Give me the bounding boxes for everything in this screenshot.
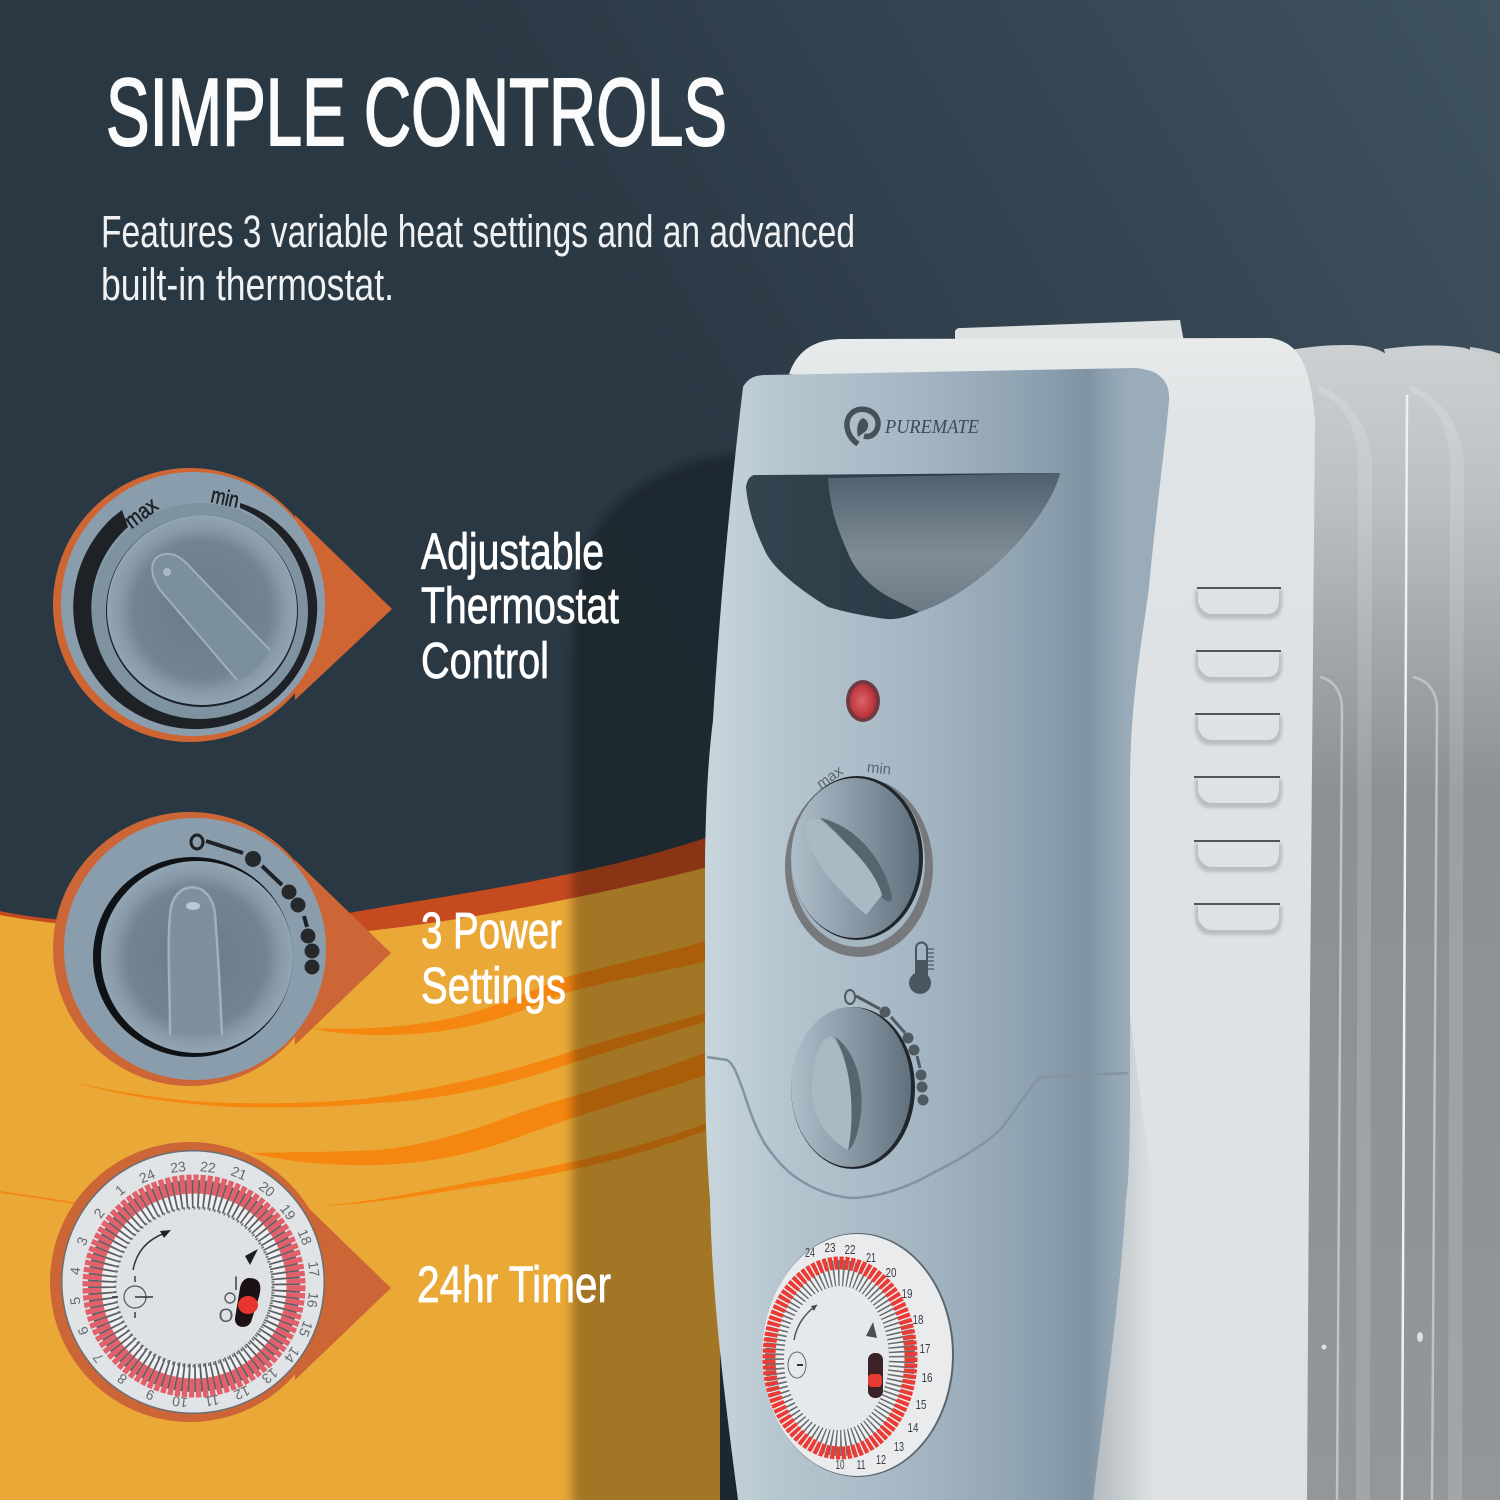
heater <box>705 320 1500 1500</box>
timer dial on heater: 23 <box>824 1240 836 1255</box>
callout: thermostat: max <box>119 492 162 533</box>
timer dial on heater: 22 <box>844 1242 856 1257</box>
white main shell <box>789 338 1315 1500</box>
label: thermostat <box>421 523 619 689</box>
callout: power settings <box>53 812 391 1086</box>
rear fins <box>1290 345 1500 1500</box>
label: thermostat: Control <box>421 632 549 689</box>
timer dial on heater: 11 <box>856 1457 866 1472</box>
callout: timer: 19 <box>277 1201 299 1223</box>
callout: timer: 11 <box>203 1392 220 1410</box>
carrying handle recess <box>746 473 1060 619</box>
callout: timer: O <box>219 1306 233 1327</box>
callout: timer: 6 <box>74 1324 92 1338</box>
callout: thermostat: min <box>209 482 241 513</box>
callout: timer: 1 <box>112 1181 128 1199</box>
label: power settings <box>421 902 566 1014</box>
callout: timer: I <box>233 1274 239 1295</box>
pointer <box>295 515 392 700</box>
callout: timer: 21 <box>229 1163 249 1183</box>
callout: timer: 9 <box>143 1386 157 1404</box>
callout: timer: 22 <box>199 1158 217 1176</box>
callout: timer: 12 <box>231 1383 252 1404</box>
thermostat knob on heater <box>785 759 933 957</box>
label: thermostat: Thermostat <box>421 577 619 634</box>
callout: timer: 14 <box>281 1344 303 1366</box>
timer dial on heater: 10 <box>836 1457 844 1472</box>
callout: timer: 16 <box>304 1291 322 1309</box>
callout: timer: 18 <box>295 1227 315 1247</box>
timer dial on heater: 19 <box>902 1286 912 1301</box>
timer dial on heater <box>762 1233 954 1477</box>
label: timer: 24hr Timer <box>417 1256 611 1313</box>
grey front panel <box>705 368 1169 1500</box>
timer dial on heater: 17 <box>920 1341 930 1356</box>
icon: thermometer <box>909 943 934 994</box>
radiator cast shadow <box>572 455 760 1500</box>
timer dial on heater: 21 <box>866 1250 876 1265</box>
timer dial on heater: 15 <box>916 1397 926 1412</box>
description: built-in thermostat. <box>101 259 394 310</box>
callout: timer: 24 <box>137 1166 157 1186</box>
thermostat knob on heater: min <box>866 759 892 779</box>
callout: thermostat <box>53 468 392 742</box>
callout: timer: 13 <box>259 1365 281 1387</box>
timer dial on heater: 18 <box>912 1312 924 1327</box>
callout: timer: 23 <box>169 1158 187 1176</box>
callout: timer: 15 <box>296 1319 316 1339</box>
callout: timer <box>50 1142 391 1422</box>
logo <box>847 409 979 444</box>
description: Features 3 variable heat settings and an advanced <box>101 206 855 257</box>
callout: timer: 3 <box>73 1234 91 1248</box>
power knob on heater <box>791 990 928 1169</box>
timer dial on heater: 14 <box>908 1420 918 1435</box>
label: power settings: Settings <box>421 957 566 1014</box>
title: SIMPLE CONTROLS <box>106 59 727 166</box>
power light <box>846 680 880 722</box>
callout: timer: 5 <box>67 1296 83 1306</box>
vents <box>1194 588 1282 935</box>
callout: timer: 7 <box>89 1350 107 1366</box>
shell shading <box>1090 1000 1154 1500</box>
callout: timer: 20 <box>256 1178 278 1200</box>
logo: PUREMATE <box>884 416 979 438</box>
description <box>101 206 855 310</box>
callout: timer: 17 <box>305 1260 323 1278</box>
callout: timer: 2 <box>90 1205 108 1221</box>
label: thermostat: Adjustable <box>421 523 604 580</box>
timer dial on heater: 13 <box>894 1439 904 1454</box>
heat waves <box>0 833 720 1500</box>
top handle cap <box>955 320 1184 342</box>
timer dial on heater: 20 <box>886 1265 896 1280</box>
callout: timer: 10 <box>171 1393 189 1411</box>
callout: timer: 4 <box>67 1266 83 1276</box>
panel seam <box>707 1057 1128 1198</box>
thermostat knob on heater: max <box>813 762 847 793</box>
timer dial on heater: 12 <box>876 1452 886 1467</box>
label: power settings: 3 Power <box>421 902 562 959</box>
timer dial on heater: 16 <box>922 1370 932 1385</box>
timer dial on heater: 24 <box>805 1245 815 1260</box>
callout: timer: 8 <box>114 1370 130 1388</box>
